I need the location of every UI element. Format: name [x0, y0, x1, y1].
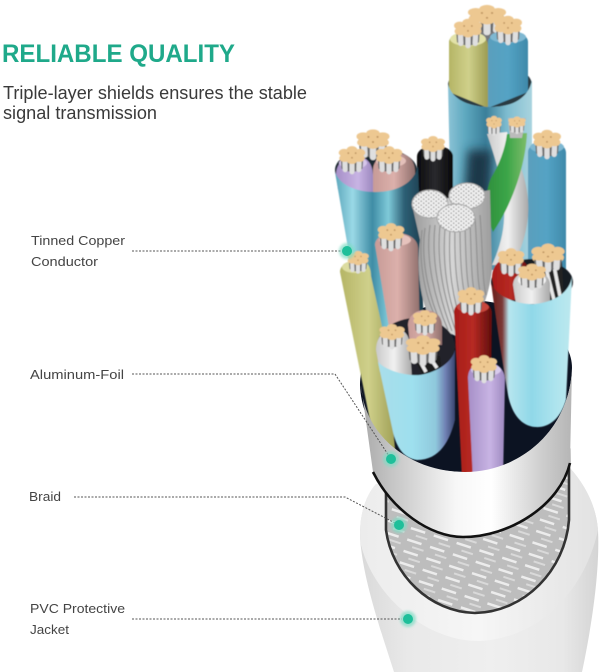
- description text: Triple-layer shields ensures the stable: [3, 83, 307, 103]
- label: Tinned Copper Conductor: Tinned Copper: [31, 233, 126, 248]
- green cable: [487, 117, 527, 232]
- label: Braid: Braid: [29, 489, 61, 504]
- label: PVC Protective Jacket: [30, 601, 416, 637]
- label: PVC Protective Jacket: Jacket: [30, 622, 69, 637]
- description text: [3, 83, 307, 123]
- label: Aluminum-Foil: [30, 367, 399, 467]
- icon: cable cross-section illustration: [335, 5, 598, 672]
- description text: signal transmission: [3, 103, 157, 123]
- title: RELIABLE QUALITY: [2, 40, 235, 68]
- red cable: [454, 287, 492, 480]
- olive long cable: [340, 251, 397, 470]
- label: Aluminum-Foil: Aluminum-Foil: [30, 367, 124, 382]
- lavender cable: [468, 355, 505, 480]
- front-left foil-wrapped cable group: [376, 310, 455, 460]
- label: PVC Protective Jacket: PVC Protective: [30, 601, 125, 616]
- label: Tinned Copper Conductor: [31, 233, 355, 269]
- PVC jacket: [360, 468, 598, 672]
- right foil-wrapped cable group: [491, 244, 573, 427]
- cable interior: [360, 300, 572, 472]
- top foil-wrapped cable group: [448, 5, 532, 270]
- left foil-wrapped cable group: [335, 129, 424, 330]
- braid layer: [386, 450, 569, 613]
- label: Tinned Copper Conductor: Conductor: [31, 254, 99, 269]
- label: Braid: [29, 489, 407, 533]
- aluminum foil band: [361, 368, 572, 537]
- pink long cable: [375, 223, 420, 345]
- right blue cable: [528, 130, 566, 290]
- black cable: [417, 136, 453, 240]
- white twisted cable: [486, 116, 528, 265]
- bare silver strand bundle: [412, 183, 492, 338]
